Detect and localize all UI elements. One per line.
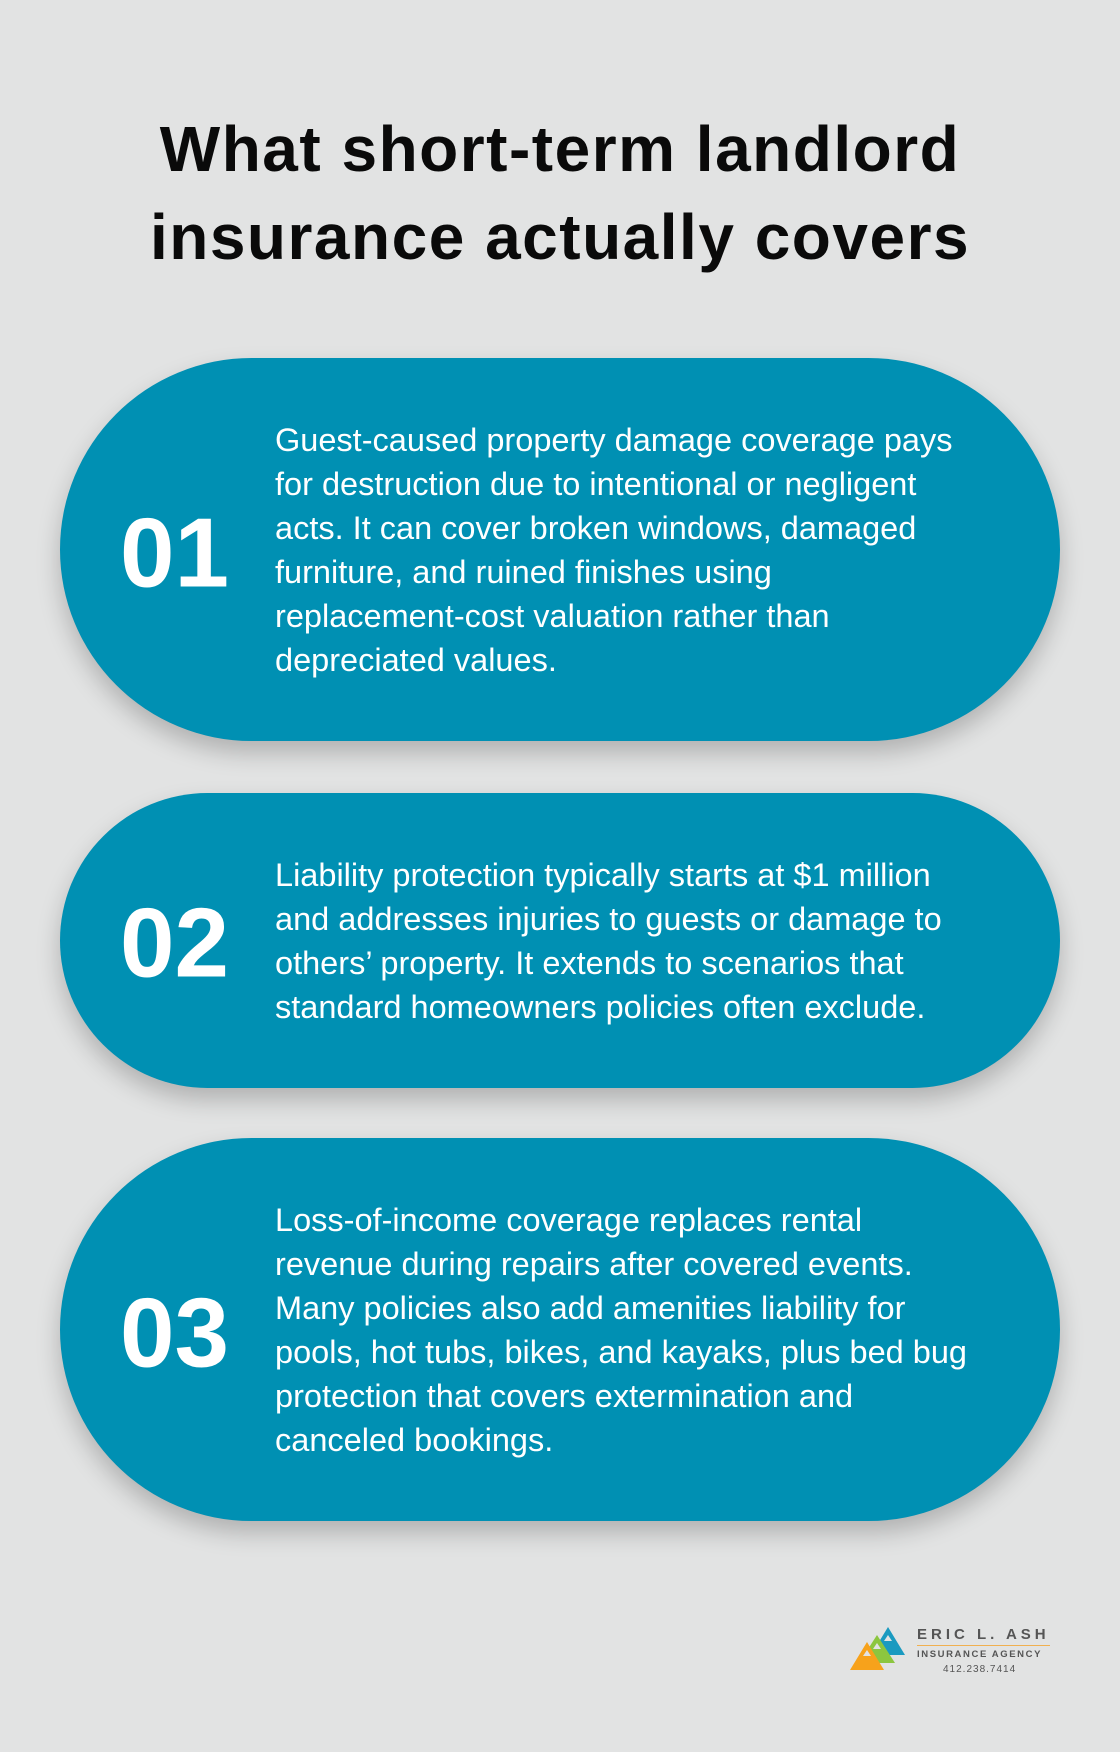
- text 01: depreciated values.: [275, 642, 557, 678]
- panel: 02: [60, 793, 1060, 1088]
- text 02: [275, 857, 942, 1025]
- text 03: protection that covers extermination and: [275, 1378, 853, 1414]
- text 02: Liability protection typically starts at $1 million: [275, 857, 931, 893]
- logo: [850, 1626, 1050, 1675]
- logo: INSURANCE AGENCY: [917, 1649, 1042, 1660]
- title: insurance actually covers: [150, 201, 970, 273]
- number 03: 03: [120, 1278, 229, 1388]
- text 03: [275, 1202, 967, 1458]
- title: [150, 113, 970, 273]
- text 03: revenue during repairs after covered events.: [275, 1246, 913, 1282]
- text 02: and addresses injuries to guests or damage to: [275, 901, 942, 937]
- text 01: replacement-cost valuation rather than: [275, 598, 830, 634]
- text 03: canceled bookings.: [275, 1422, 553, 1458]
- text 01: [275, 422, 952, 678]
- title: What short-term landlord: [160, 113, 960, 185]
- logo text: ERIC L. ASH: [917, 1626, 1050, 1643]
- text 01: for destruction due to intentional or negligent: [275, 466, 916, 502]
- number 02: 02: [120, 888, 229, 998]
- logo: 412.238.7414: [943, 1664, 1016, 1675]
- icon: triangles: [850, 1627, 905, 1670]
- panel: 01: [60, 358, 1060, 741]
- text 02: standard homeowners policies often exclude.: [275, 989, 925, 1025]
- text 03: Many policies also add amenities liability for: [275, 1290, 905, 1326]
- text 03: pools, hot tubs, bikes, and kayaks, plus bed bug: [275, 1334, 967, 1370]
- text 01: furniture, and ruined finishes using: [275, 554, 772, 590]
- text 01: Guest-caused property damage coverage pays: [275, 422, 952, 458]
- panel: 03: [60, 1138, 1060, 1521]
- text 02: others’ property. It extends to scenarios that: [275, 945, 904, 981]
- number 01: 01: [120, 498, 229, 608]
- text 01: acts. It can cover broken windows, damaged: [275, 510, 916, 546]
- text 03: Loss-of-income coverage replaces rental: [275, 1202, 862, 1238]
